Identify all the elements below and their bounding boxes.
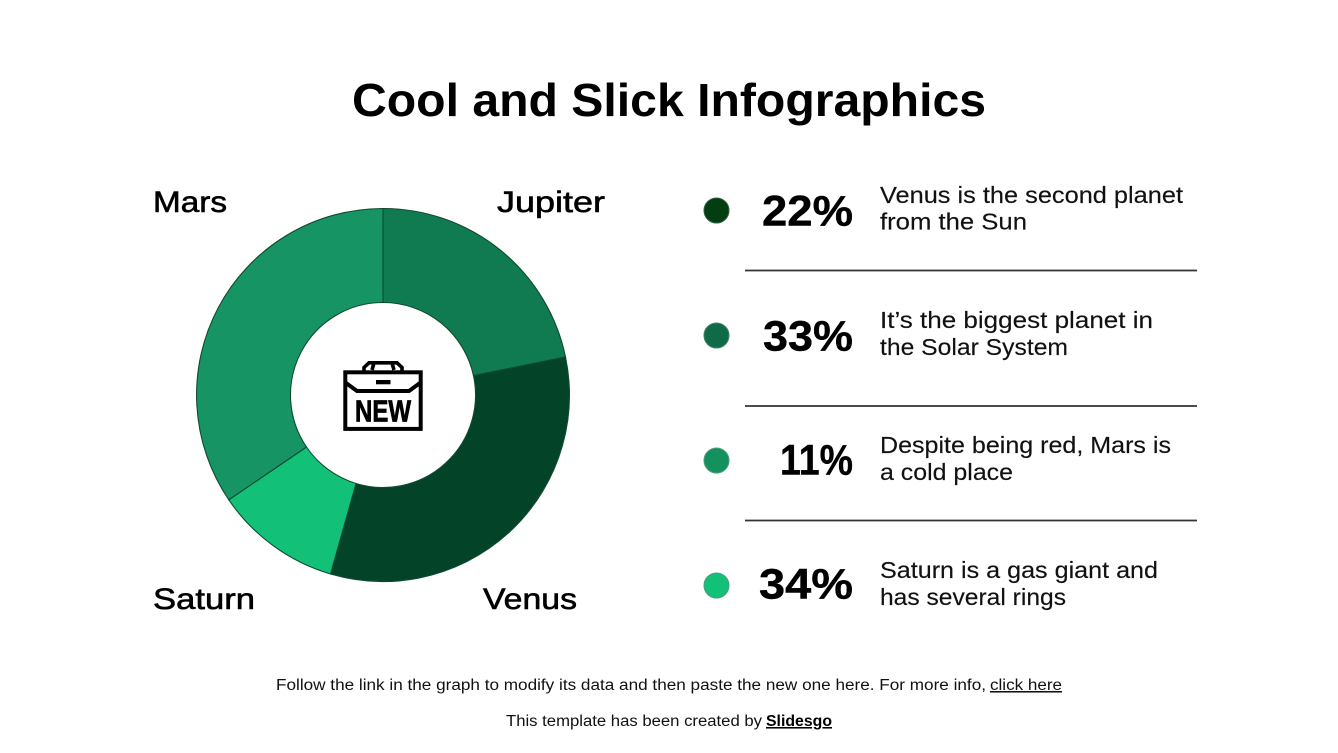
footer link: click here: [990, 677, 1062, 694]
briefcase handle: [364, 363, 402, 371]
label: Mars: Mars: [153, 186, 227, 219]
description: It’s the biggest planet in: [880, 307, 1153, 333]
description: the Solar System: [880, 334, 1068, 360]
legend row: Venus: [704, 182, 1183, 236]
title: Cool and Slick Infographics: [352, 74, 986, 126]
footer credit: [506, 713, 832, 730]
segment: Mars: [197, 208, 383, 500]
icon word: NEW: [355, 394, 412, 428]
icon: new briefcase: [345, 363, 421, 429]
legend row: Saturn: [704, 557, 1158, 610]
briefcase flap: [346, 383, 420, 391]
legend dot: [704, 323, 729, 348]
description: Despite being red, Mars is: [880, 432, 1171, 458]
label: Saturn: Saturn: [153, 583, 255, 616]
footer note: [276, 677, 1062, 694]
description: a cold place: [880, 459, 1013, 485]
label: Jupiter: Jupiter: [497, 186, 605, 219]
legend dot: [704, 198, 729, 223]
footer sentence: Follow the link in the graph to modify its data and then paste the new one here. For more info,: [276, 677, 986, 694]
legend row: Jupiter: [704, 307, 1153, 360]
percentage: 33%: [763, 312, 853, 360]
legend dot: [704, 573, 729, 598]
briefcase clasp: [376, 380, 390, 384]
description: Saturn is a gas giant and: [880, 557, 1158, 583]
credit sentence: This template has been created by: [506, 713, 762, 730]
legend row: Mars: [704, 432, 1171, 485]
label: Venus: Venus: [483, 583, 577, 616]
description: from the Sun: [880, 208, 1027, 234]
briefcase body: [345, 372, 421, 429]
percentage: 34%: [759, 560, 853, 608]
segment: Jupiter: [383, 208, 566, 376]
description: has several rings: [880, 584, 1066, 610]
legend dot: [704, 448, 729, 473]
description: Venus is the second planet: [880, 182, 1183, 208]
segment: Saturn: [229, 447, 356, 574]
credit link: Slidesgo: [766, 713, 832, 730]
percentage: 22%: [762, 188, 853, 236]
donut chart: [197, 208, 569, 582]
percentage: 11%: [780, 436, 853, 484]
segment: Venus: [330, 357, 569, 582]
